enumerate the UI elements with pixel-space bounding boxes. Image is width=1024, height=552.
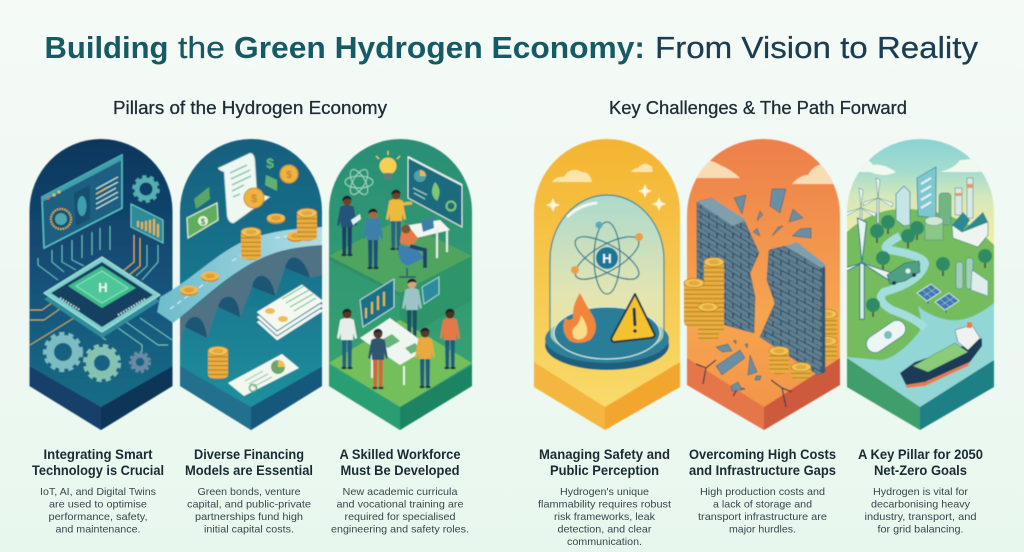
heading: challenges: Key Challenges & The Path Forward [609,98,907,118]
caption: safety and perception: Managing Safety and [539,446,670,462]
group: upper team [337,190,450,277]
caption: skilled workforce: required for specialised [344,511,456,523]
icon: hydrogen tank [875,329,897,344]
icon: inner plate [554,307,660,359]
icon: warning triangle [611,294,655,342]
caption: diverse financing: initial capital costs. [204,524,294,536]
icon: flame [563,293,596,343]
icon: broken wall left [697,198,759,333]
caption: costs and infrastructure: transport infrastructure are [698,511,827,523]
caption: safety and perception: risk frameworks, leak [554,511,656,523]
icon: dollar bills [187,155,277,238]
icon: broken wall right [760,242,825,375]
icon: scroll document [218,153,270,223]
caption: diverse financing [185,446,313,536]
caption: net-zero goals: decarbonising heavy [871,498,971,510]
icon: trees [866,215,992,317]
icon: bottom gears [45,334,150,380]
icon: coin stacks behind right wall [817,310,837,360]
icon: hydrogen chip: H [98,280,108,295]
icon: hydrogen atom: H [602,251,612,266]
caption: skilled workforce: and vocational training are [336,498,464,510]
caption: net-zero goals: Net-Zero Goals [874,462,967,478]
caption: safety and perception: communication. [567,536,642,548]
icon: base plate [544,326,670,371]
icon: presentation screen [408,157,462,227]
title: Green Hydrogen Economy: [234,30,645,65]
caption: costs and infrastructure: major hurdles. [729,524,796,536]
icon: river [881,236,925,328]
title [44,30,979,65]
icon: dollar bills: $ [266,155,274,171]
panel: smart technology [29,139,173,431]
icon: city towers [896,167,973,240]
caption: costs and infrastructure: High production costs and [700,486,825,498]
panel: net-zero goals [846,138,995,430]
icon: clouds [696,160,834,185]
icon: top gear [134,177,158,201]
caption: skilled workforce: engineering and safety roles. [331,524,469,536]
icon: hydrogen chip [44,257,160,338]
caption: net-zero goals [858,446,983,536]
icon: stack of reports [255,284,324,341]
caption: diverse financing: Diverse Financing [194,446,304,462]
caption: smart technology [32,446,164,536]
icon: solar panels [917,284,959,313]
icon: glass dome [550,195,664,355]
icon: bar chart card [131,204,163,243]
icon: bridge [180,245,322,342]
caption: diverse financing: Models are Essential [185,462,313,478]
caption: smart technology: performance, safety, [48,511,148,523]
icon: cracks [696,360,792,407]
caption: diverse financing: partnerships fund high [195,511,303,523]
title: From Vision to Reality [655,30,979,65]
sea [847,300,995,410]
title: Building [44,30,168,65]
icon: coins on road [180,208,317,296]
caption: safety and perception: detection, and clear [558,524,652,536]
icon: gold coins [244,165,298,224]
caption: net-zero goals: for grid balancing. [878,524,964,536]
icon: coin stack on floor [208,346,228,379]
icon: gold coins: $ [251,193,257,205]
icon: atom [345,167,373,197]
icon: road over bridge [157,227,322,323]
caption: skilled workforce: Must Be Developed [340,462,460,478]
caption: costs and infrastructure [689,446,836,536]
group: lower team [337,277,460,389]
icon: clouds [859,158,982,176]
caption: net-zero goals: Hydrogen is vital for [873,486,969,498]
icon: light bulb [376,151,400,180]
caption: skilled workforce [331,446,469,536]
caption: costs and infrastructure: Overcoming High Costs [689,446,836,462]
icon: flying debris [734,189,811,238]
icon: storage plant [956,258,988,296]
land [847,209,994,360]
caption: smart technology: are used to optimise [49,498,147,510]
caption: net-zero goals: A Key Pillar for 2050 [858,446,983,462]
caption: safety and perception [538,446,671,548]
caption: safety and perception: flammability requires robust [538,498,671,510]
panel: skilled workforce [329,139,473,431]
icon: coin stacks [684,258,811,380]
caption: net-zero goals: industry, transport, and [864,511,977,523]
caption: skilled workforce: A Skilled Workforce [340,446,461,462]
caption: skilled workforce: New academic curricula [342,486,458,498]
icon: wind turbines [828,178,896,319]
panel: costs and infrastructure [680,139,845,431]
caption: costs and infrastructure: and Infrastructure Gaps [689,462,836,478]
icon: report with pie chart [228,354,299,396]
title: the [178,30,225,65]
caption: smart technology: Integrating Smart [44,446,153,462]
caption: diverse financing: capital, and public-private [187,498,311,510]
caption: smart technology: and maintenance. [56,524,140,536]
caption: diverse financing: Green bonds, venture [198,486,301,498]
icon: gold coins: $ [286,170,292,181]
icon: sparkles [546,184,666,212]
icon: dollar bills: $ [201,218,206,226]
circuit traces [30,226,172,352]
panel: safety and perception [534,139,681,431]
panel: diverse financing [157,139,324,431]
icon: hydrogen atom [569,222,645,294]
icon: clouds [552,164,652,182]
caption: costs and infrastructure: a lack of storage and [713,498,812,510]
icon: rubble [716,340,761,391]
icon: factory [952,212,988,247]
caption: smart technology: Technology is Crucial [32,462,164,478]
icon: cargo ship [900,322,982,388]
icon: green van [887,261,920,285]
caption: smart technology: IoT, AI, and Digital Twins [40,486,156,498]
caption: safety and perception: Hydrogen's unique [560,486,649,498]
caption: safety and perception: Public Perception [550,462,659,478]
icon: dashboard screen [42,155,122,248]
heading: pillars: Pillars of the Hydrogen Economy [113,98,387,118]
